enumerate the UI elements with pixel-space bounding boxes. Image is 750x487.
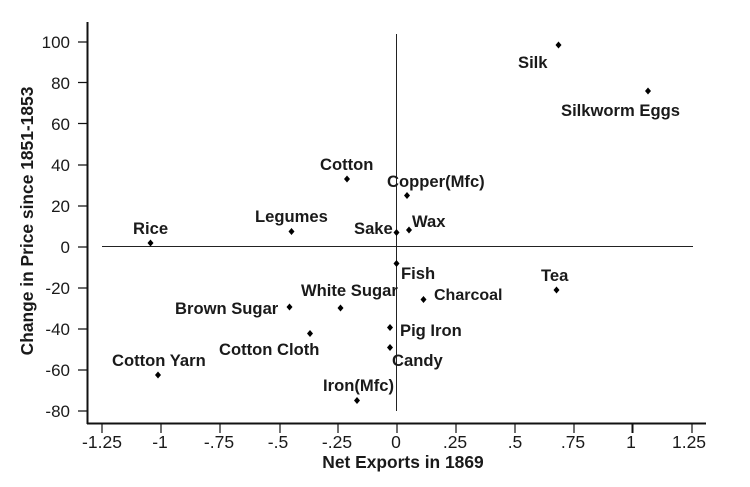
x axis tick labels: 1.25: [672, 432, 706, 452]
x axis tick labels: -.5: [268, 432, 288, 452]
point labels: Copper(Mfc): [387, 172, 485, 191]
point labels: Cotton Yarn: [112, 351, 206, 370]
point labels: Sake: [354, 219, 393, 238]
point labels: [112, 53, 680, 395]
y axis tick labels: 0: [61, 238, 70, 257]
point labels: Pig Iron: [400, 321, 462, 340]
point labels: Wax: [412, 212, 446, 231]
point labels: Silkworm Eggs: [561, 101, 680, 120]
point labels: Iron(Mfc): [323, 376, 394, 395]
point labels: Tea: [541, 266, 569, 285]
x axis tick labels: -.75: [204, 432, 234, 452]
point labels: Candy: [392, 351, 443, 370]
point labels: Rice: [133, 219, 168, 238]
y axis tick labels: 20: [51, 197, 70, 216]
point labels: Silk: [518, 53, 548, 72]
y axis tick labels: 40: [51, 156, 70, 175]
point labels: Brown Sugar: [175, 299, 279, 318]
scatter markers: [148, 42, 651, 404]
x axis: [87, 424, 706, 433]
x axis tick labels: -1.25: [82, 432, 122, 452]
point labels: Fish: [401, 264, 435, 283]
x axis tick labels: -1: [152, 432, 168, 452]
x axis title: Net Exports in 1869: [322, 452, 484, 472]
y axis tick labels: -20: [45, 279, 70, 298]
x axis tick labels: .5: [508, 432, 522, 452]
x axis tick labels: -.25: [322, 432, 352, 452]
point labels: White Sugar: [301, 281, 398, 300]
point labels: Cotton Cloth: [219, 340, 319, 359]
x axis tick labels: 0: [391, 432, 401, 452]
y axis: [78, 22, 88, 424]
x axis tick labels: [82, 432, 706, 452]
point labels: Charcoal: [434, 287, 502, 304]
y axis tick labels: 80: [51, 74, 70, 93]
point labels: Cotton: [320, 155, 373, 174]
y axis tick labels: [42, 33, 70, 421]
y axis tick labels: 60: [51, 115, 70, 134]
point labels: Legumes: [255, 207, 328, 226]
x axis tick labels: .25: [443, 432, 467, 452]
y axis tick labels: -60: [45, 361, 70, 380]
y axis tick labels: -80: [45, 402, 70, 421]
y axis title: Change in Price since 1851-1853: [17, 86, 37, 355]
x axis tick labels: 1: [626, 432, 636, 452]
y axis tick labels: 100: [42, 33, 70, 52]
y axis tick labels: -40: [45, 320, 70, 339]
x axis tick labels: .75: [561, 432, 585, 452]
reference lines at zero: [102, 34, 693, 411]
